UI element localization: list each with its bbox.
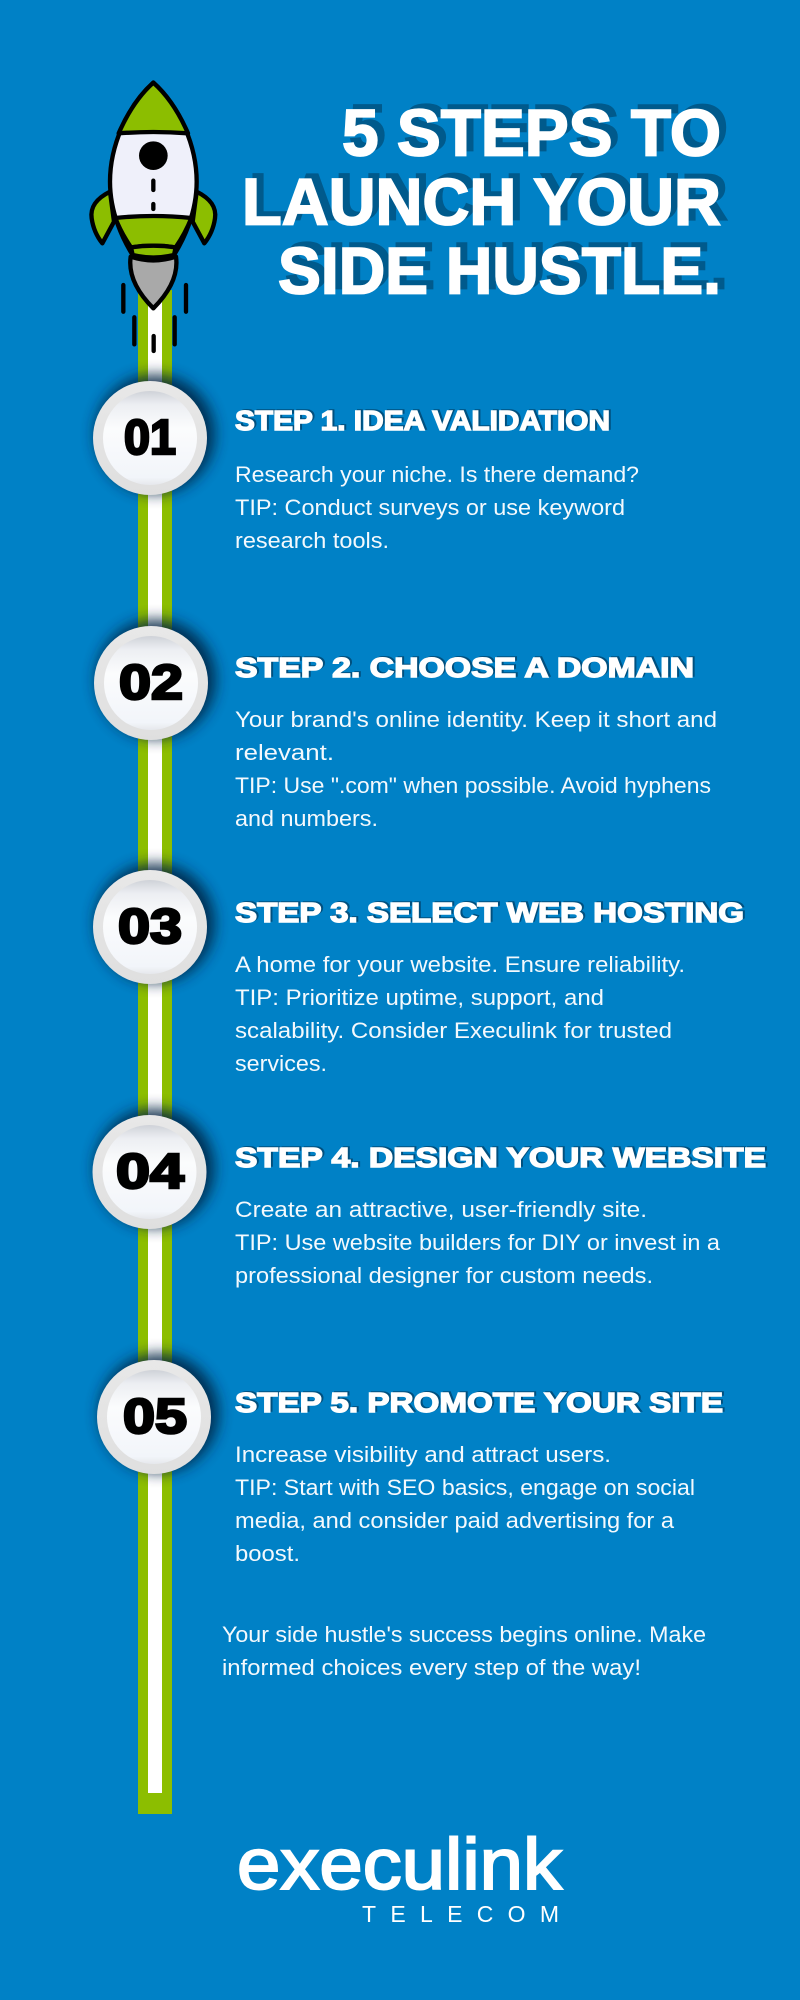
logo: execulink telecom: TELECOM bbox=[362, 1901, 559, 1927]
heading: step 4: STEP 4. DESIGN YOUR WEBSITE bbox=[237, 1141, 768, 1172]
panel: step 1 bbox=[235, 404, 639, 553]
heading: step 4: STEP 4. DESIGN YOUR WEBSITE bbox=[235, 1142, 766, 1173]
text: closing statement bbox=[222, 1622, 706, 1680]
text: step 1 description: research tools. bbox=[235, 528, 389, 553]
panel: step 2 bbox=[235, 651, 717, 831]
text: step 3 description: services. bbox=[235, 1051, 327, 1076]
badge: 04 bbox=[92, 1108, 214, 1229]
panel: step 5 bbox=[235, 1386, 725, 1566]
text: step 4 description: TIP: Use website builders for DIY or invest in a bbox=[235, 1230, 721, 1255]
text: step 2 description: relevant. bbox=[235, 740, 334, 765]
text: step 2 description: Your brand's online identity. Keep it short and bbox=[235, 707, 717, 732]
text: step 4 description bbox=[235, 1197, 721, 1288]
heading: step 3: STEP 3. SELECT WEB HOSTING bbox=[235, 897, 744, 928]
badge: 04: 04 bbox=[116, 1145, 184, 1199]
text: step 4 description: Create an attractive, user-friendly site. bbox=[235, 1197, 647, 1222]
heading: step 2: STEP 2. CHOOSE A DOMAIN bbox=[235, 652, 694, 683]
logo: execulink telecom: execulink bbox=[237, 1825, 563, 1905]
text: step 2 description bbox=[235, 707, 717, 831]
heading: title: SIDE HUSTLE. bbox=[285, 228, 728, 302]
heading: step 5: STEP 5. PROMOTE YOUR SITE bbox=[237, 1386, 725, 1417]
badge: 03: 03 bbox=[118, 900, 182, 954]
text: step 2 description: TIP: Use ".com" when possible. Avoid hyphens bbox=[235, 773, 711, 798]
panel: step 4 bbox=[235, 1141, 768, 1288]
text: step 4 description: professional designer for custom needs. bbox=[235, 1263, 653, 1288]
heading: title: LAUNCH YOUR bbox=[249, 160, 728, 234]
heading: step 1: STEP 1. IDEA VALIDATION bbox=[235, 405, 610, 436]
badge: 05: 05 bbox=[123, 1390, 187, 1444]
text: step 5 description: media, and consider paid advertising for a bbox=[235, 1508, 675, 1533]
heading: step 1: STEP 1. IDEA VALIDATION bbox=[237, 404, 612, 435]
heading: title bbox=[242, 90, 728, 308]
heading: title: LAUNCH YOUR bbox=[242, 164, 721, 238]
badge: 01: 01 bbox=[124, 411, 176, 465]
heading: title: SIDE HUSTLE. bbox=[278, 234, 721, 308]
badge: 02 bbox=[94, 619, 216, 740]
text: step 2 description: and numbers. bbox=[235, 806, 378, 831]
text: step 1 description bbox=[235, 462, 639, 553]
badge: 03 bbox=[93, 863, 215, 984]
icon: rocket bbox=[91, 83, 215, 351]
text: step 3 description bbox=[235, 952, 685, 1076]
heading: title: 5 STEPS TO bbox=[349, 90, 728, 164]
text: closing statement: informed choices every step of the way! bbox=[222, 1655, 641, 1680]
text: step 3 description: scalability. Consider Execulink for trusted bbox=[235, 1018, 672, 1043]
badge: 02: 02 bbox=[119, 656, 183, 710]
text: step 1 description: TIP: Conduct surveys or use keyword bbox=[235, 495, 625, 520]
badge: 05 bbox=[97, 1353, 219, 1474]
text: step 5 description: boost. bbox=[235, 1541, 300, 1566]
heading: step 5: STEP 5. PROMOTE YOUR SITE bbox=[235, 1387, 723, 1418]
text: step 5 description: Increase visibility and attract users. bbox=[235, 1442, 611, 1467]
text: step 3 description: A home for your website. Ensure reliability. bbox=[235, 952, 685, 977]
text: step 3 description: TIP: Prioritize uptime, support, and bbox=[235, 985, 604, 1010]
heading: title: 5 STEPS TO bbox=[342, 96, 721, 170]
text: closing statement: Your side hustle's success begins online. Make bbox=[222, 1622, 706, 1647]
launch trail bar bbox=[138, 290, 172, 1814]
text: step 1 description: Research your niche. Is there demand? bbox=[235, 462, 639, 487]
panel: step 3 bbox=[235, 896, 746, 1076]
heading: step 3: STEP 3. SELECT WEB HOSTING bbox=[237, 896, 746, 927]
heading: step 2: STEP 2. CHOOSE A DOMAIN bbox=[237, 651, 696, 682]
text: step 5 description bbox=[235, 1442, 695, 1566]
badge: 01 bbox=[93, 374, 215, 495]
text: step 5 description: TIP: Start with SEO basics, engage on social bbox=[235, 1475, 695, 1500]
